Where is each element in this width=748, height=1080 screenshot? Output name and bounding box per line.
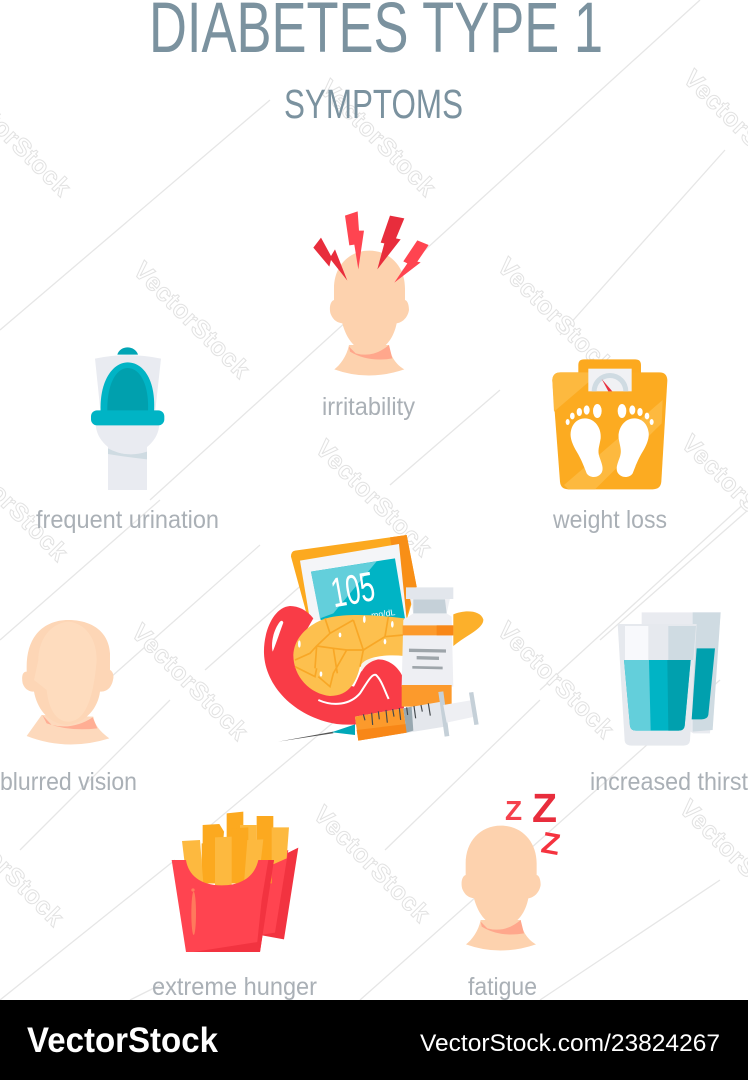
syringe [278, 691, 479, 742]
watermarks: VectorStock [128, 256, 255, 384]
label: frequent urination: frequent urination [36, 506, 219, 534]
glucose meter: 105 [327, 562, 378, 616]
icon: blank head (blurred vision) [22, 620, 113, 744]
label: fatigue: fatigue [468, 973, 537, 1001]
watermarks: VectorStock [492, 616, 619, 744]
icon: head with Z letters: Z [539, 826, 563, 862]
icon: head with lightning bolts [313, 211, 429, 375]
footer bar: VectorStock.com/23824267 [420, 1030, 720, 1057]
label: irritability: irritability [322, 393, 415, 421]
vial [402, 587, 453, 707]
icon: french fries [172, 812, 298, 952]
footer bar [0, 1000, 748, 1080]
icon: head with Z letters: Z [532, 785, 557, 831]
footer bar: VectorStock [27, 1021, 219, 1060]
icon: head with Z letters: Z [505, 795, 522, 826]
label: blurred vision: blurred vision [0, 768, 137, 796]
icon: weight scale [552, 359, 667, 489]
icon: toilet [91, 347, 164, 490]
label: extreme hunger: extreme hunger [152, 973, 317, 1001]
watermarks: VectorStock [310, 434, 437, 562]
icon: head with Z letters [462, 785, 563, 950]
watermarks: VectorStock [492, 252, 619, 380]
watermarks: VectorStock [126, 618, 253, 746]
watermarks: VectorStock [308, 800, 435, 928]
glucose meter [291, 535, 417, 620]
watermarks: VectorStock [314, 74, 441, 202]
glucose meter: mg/dL [371, 607, 396, 620]
pancreas [293, 615, 404, 696]
label: weight loss: weight loss [552, 506, 667, 534]
stomach [264, 606, 404, 725]
center illustration: meter, pancreas, vial, syringe [264, 535, 483, 742]
icon: glasses of water [618, 612, 721, 746]
subtitle: SYMPTOMS [284, 81, 463, 127]
